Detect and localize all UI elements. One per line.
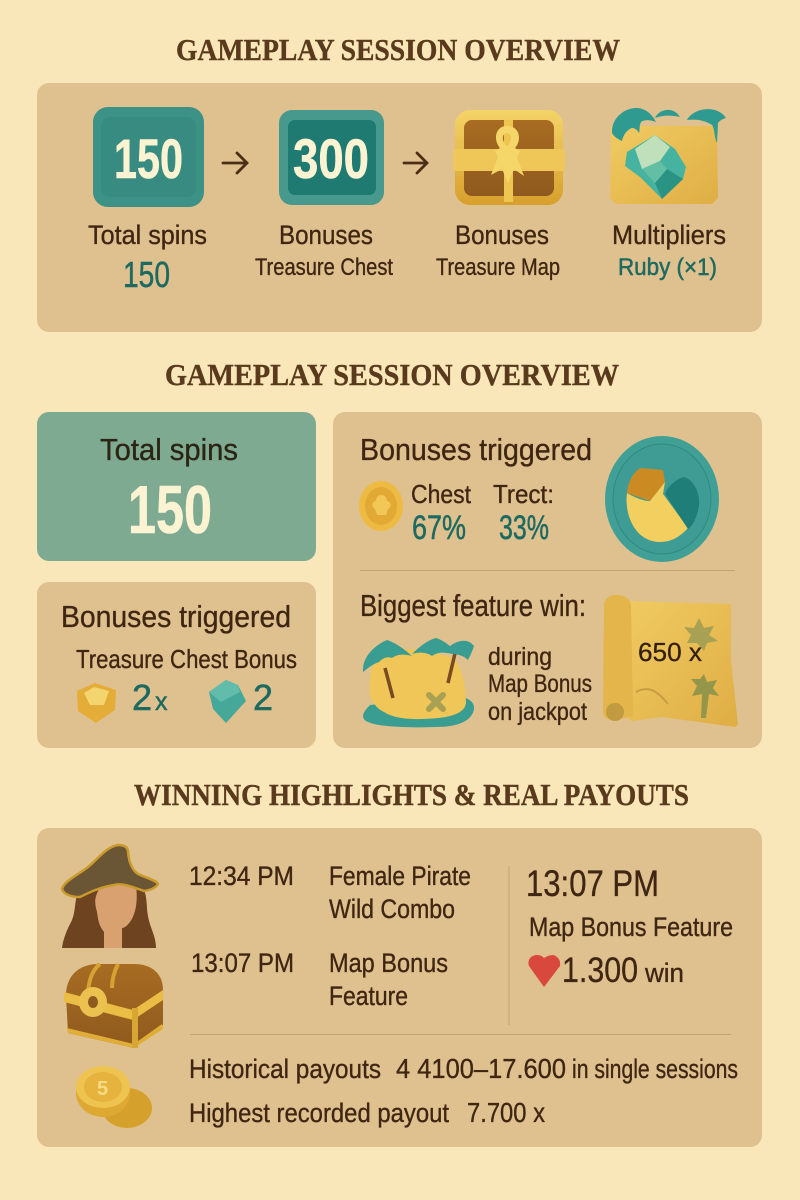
text: historical payouts: in single sessions (572, 1054, 738, 1084)
icon: female pirate (62, 845, 158, 948)
panel: total spins (37, 412, 316, 561)
icon: gold shield (77, 683, 116, 723)
entry: 12:34 pm (189, 861, 471, 924)
entry: 12:34 pm: Female Pirate (329, 861, 471, 891)
pie chart: bonus split (605, 436, 719, 562)
entry: 13:07 pm: Map Bonus (329, 948, 448, 978)
panel: bonuses and biggest win (333, 412, 762, 748)
text: highest recorded payout: Highest recorded payout (189, 1098, 449, 1128)
icon: gold coins: 5 (97, 1078, 108, 1100)
callout: map bonus win: Map Bonus Feature (529, 912, 733, 942)
label: bonuses treasure map (436, 220, 560, 281)
icon: gem on map (610, 108, 726, 204)
icon: treasure map scroll: 650 x (638, 637, 702, 667)
icon: gold coins (76, 1066, 152, 1128)
label: total spins: 150 (123, 254, 170, 295)
heading: bonuses triggered: Bonuses triggered (360, 432, 592, 467)
icon: gold coin (359, 481, 403, 531)
stat: chest share: Chest (411, 479, 472, 509)
text: during map bonus on jackpot: Map Bonus (488, 670, 592, 698)
panel: session flow (37, 83, 762, 332)
stat: trect share: Trect: (493, 479, 554, 509)
icon: treasure chest bonus badge: 300 (293, 127, 369, 190)
entry: 13:07 pm: Feature (329, 981, 408, 1011)
text: historical payouts (189, 1053, 738, 1084)
label: bonuses treasure chest (255, 220, 393, 281)
title: second section: GAMEPLAY SESSION OVERVIEW (165, 357, 619, 392)
count: gold: x (155, 688, 168, 716)
icon: total spins badge: 150 (114, 127, 183, 190)
text: highest recorded payout: 7.700 x (467, 1097, 545, 1128)
title: first section: GAMEPLAY SESSION OVERVIEW (176, 32, 620, 67)
label: multipliers (612, 220, 726, 281)
stat: chest share (411, 479, 472, 547)
stat: trect share: 33% (499, 509, 549, 547)
label: multipliers: Ruby (×1) (618, 254, 717, 281)
arrow: spins to bonus (223, 153, 247, 173)
text: during map bonus on jackpot: on jackpot (488, 698, 587, 726)
label: total spins: Total spins (88, 220, 207, 250)
arrow: bonus to map (404, 153, 427, 173)
label: bonuses treasure chest: Treasure Chest (255, 254, 393, 281)
icon: treasure chest bonus badge (279, 110, 384, 205)
panel: bonuses triggered counts (37, 582, 316, 748)
panel: winning highlights (37, 828, 762, 1147)
count: gold: 2 (132, 677, 152, 718)
icon: treasure chest (64, 964, 163, 1048)
icon: treasure map scroll (603, 595, 738, 727)
callout: map bonus win: win (644, 958, 684, 988)
panel: bonuses triggered counts: Treasure Chest Bonus (76, 644, 297, 674)
callout: map bonus win: 13:07 PM (526, 863, 659, 904)
panel: total spins: 150 (128, 472, 212, 548)
icon: gift chest (453, 110, 565, 205)
text: during map bonus on jackpot (488, 643, 592, 726)
text: during map bonus on jackpot: during (488, 643, 552, 671)
entry: 12:34 pm: Wild Combo (329, 894, 455, 924)
panel: bonuses triggered counts: Bonuses triggered (61, 599, 291, 634)
icon: red heart gem (528, 955, 560, 987)
count: teal: 2 (253, 677, 273, 718)
label: bonuses treasure map: Bonuses (455, 220, 549, 250)
icon: teal gem (209, 680, 246, 723)
label: bonuses treasure chest: Bonuses (279, 220, 373, 250)
heading: biggest feature win: Biggest feature win: (360, 588, 586, 623)
label: multipliers: Multipliers (612, 220, 726, 250)
label: bonuses treasure map: Treasure Map (436, 254, 560, 281)
stat: chest share: 67% (412, 509, 466, 547)
icon: treasure island (363, 638, 474, 727)
callout: map bonus win: 1.300 (562, 951, 638, 990)
entry: 12:34 pm: 12:34 PM (189, 861, 294, 891)
panel: total spins: Total spins (100, 432, 238, 467)
icon: total spins badge (93, 107, 204, 207)
title: third section: WINNING HIGHLIGHTS & REAL PAYOUTS (134, 777, 689, 812)
entry: 13:07 pm: 13:07 PM (191, 948, 294, 978)
text: historical payouts: Historical payouts (189, 1054, 381, 1084)
stat: trect share (493, 479, 554, 547)
callout: map bonus win (526, 863, 733, 990)
text: historical payouts: 4 4100–17.600 (396, 1053, 566, 1084)
entry: 13:07 pm (191, 948, 448, 1011)
label: total spins (88, 220, 207, 295)
